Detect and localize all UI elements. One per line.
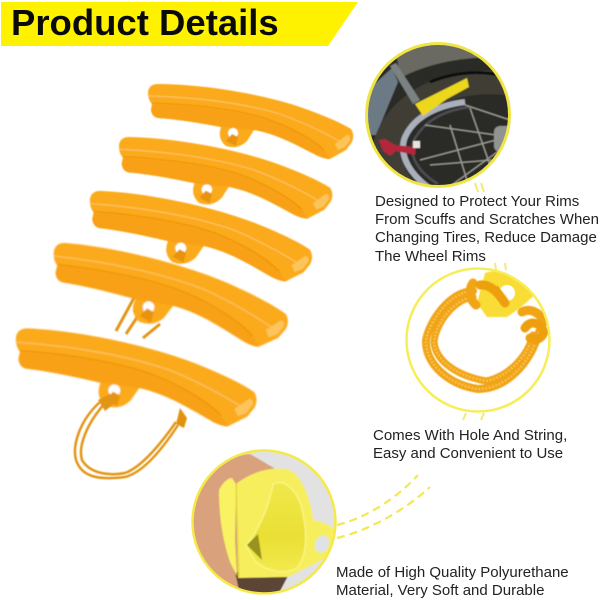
yellow protector	[415, 78, 469, 116]
text: hole and string: Comes With Hole And String,	[373, 427, 567, 444]
yellow body	[237, 469, 335, 578]
text: rim protection: Changing Tires, Reduce Damage	[375, 229, 597, 246]
red tool	[379, 139, 416, 156]
connector dashes	[463, 183, 506, 420]
title: Product Details	[11, 2, 279, 43]
strings behind tire levers	[75, 296, 178, 478]
banner: Product Details title	[1, 2, 358, 46]
connector dashes to soft material photo	[337, 475, 430, 538]
text: material: Made of High Quality Polyurethane	[336, 564, 569, 581]
tire lever 1	[148, 84, 353, 159]
text: rim protection: The Wheel Rims	[375, 248, 486, 265]
tire lever 2	[118, 137, 333, 219]
hand	[194, 454, 274, 588]
text: rim protection: Designed to Protect Your Rims	[375, 193, 579, 210]
tire lever 3	[87, 190, 315, 283]
photo circle: soft polyurethane	[190, 450, 340, 595]
text: hole and string	[373, 427, 567, 462]
tire lever 4	[47, 242, 293, 349]
tire lever 5	[12, 328, 259, 428]
photo circle: hole and string	[406, 268, 550, 412]
text: rim protection: From Scuffs and Scratches When	[375, 211, 599, 228]
string knots	[98, 394, 187, 428]
yellow tab	[477, 269, 537, 317]
pry bar	[390, 63, 420, 104]
text: rim protection	[375, 193, 599, 265]
text: hole and string: Easy and Convenient to Use	[373, 445, 563, 462]
hole in tab	[314, 534, 330, 554]
left lip	[219, 478, 237, 576]
hub	[493, 125, 508, 152]
cavity	[246, 482, 306, 572]
photo circle: lever protecting a wheel rim	[365, 42, 511, 188]
text: material	[336, 564, 569, 599]
text: material: Material, Very Soft and Durable	[336, 582, 544, 599]
